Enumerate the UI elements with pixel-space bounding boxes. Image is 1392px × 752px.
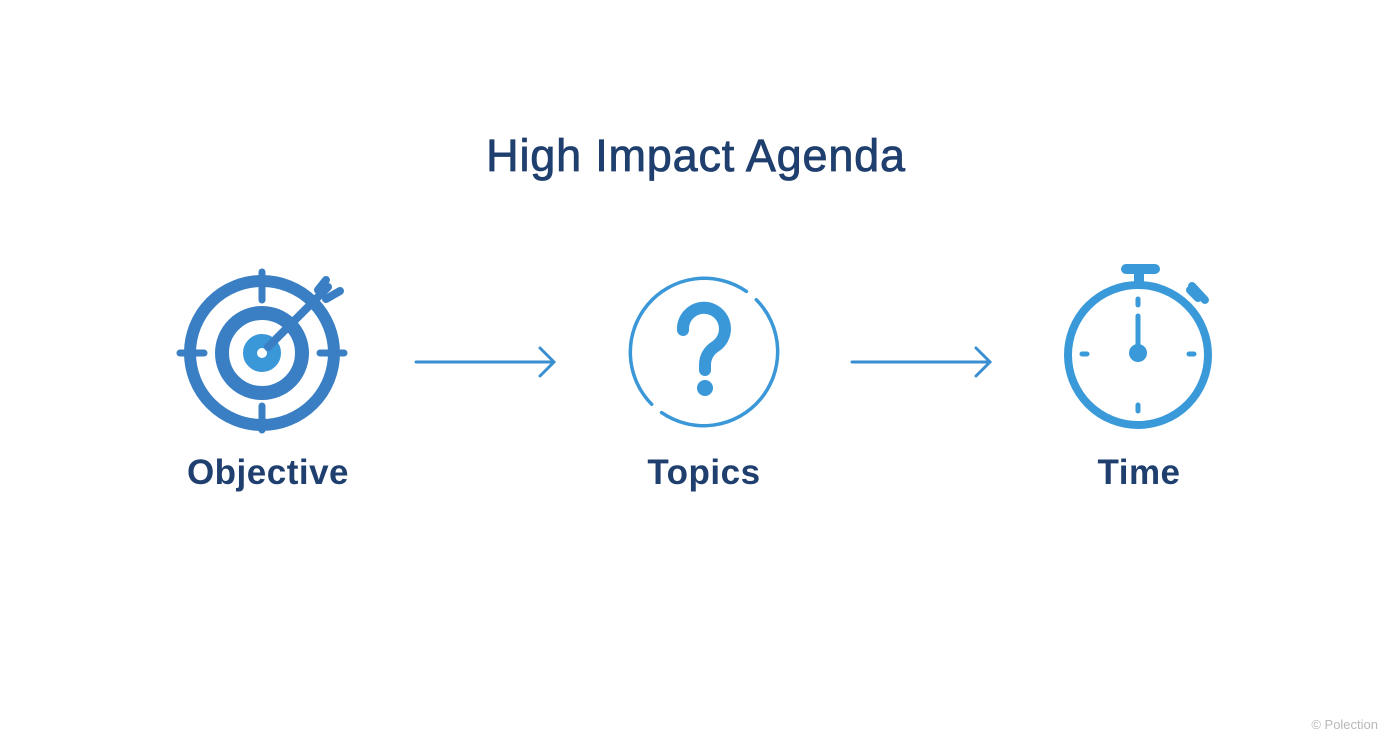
title: High Impact Agenda — [486, 130, 906, 181]
arrow 2 — [852, 348, 990, 376]
icon: stopwatch — [1068, 269, 1208, 425]
label: Time: Time — [1097, 453, 1181, 492]
label: Topics: Topics — [647, 453, 761, 492]
icon: target — [180, 272, 344, 430]
icon: question — [630, 278, 778, 426]
watermark: © Polection — [1311, 717, 1378, 732]
label: Objective: Objective — [187, 453, 349, 492]
arrow 1 — [416, 348, 554, 376]
